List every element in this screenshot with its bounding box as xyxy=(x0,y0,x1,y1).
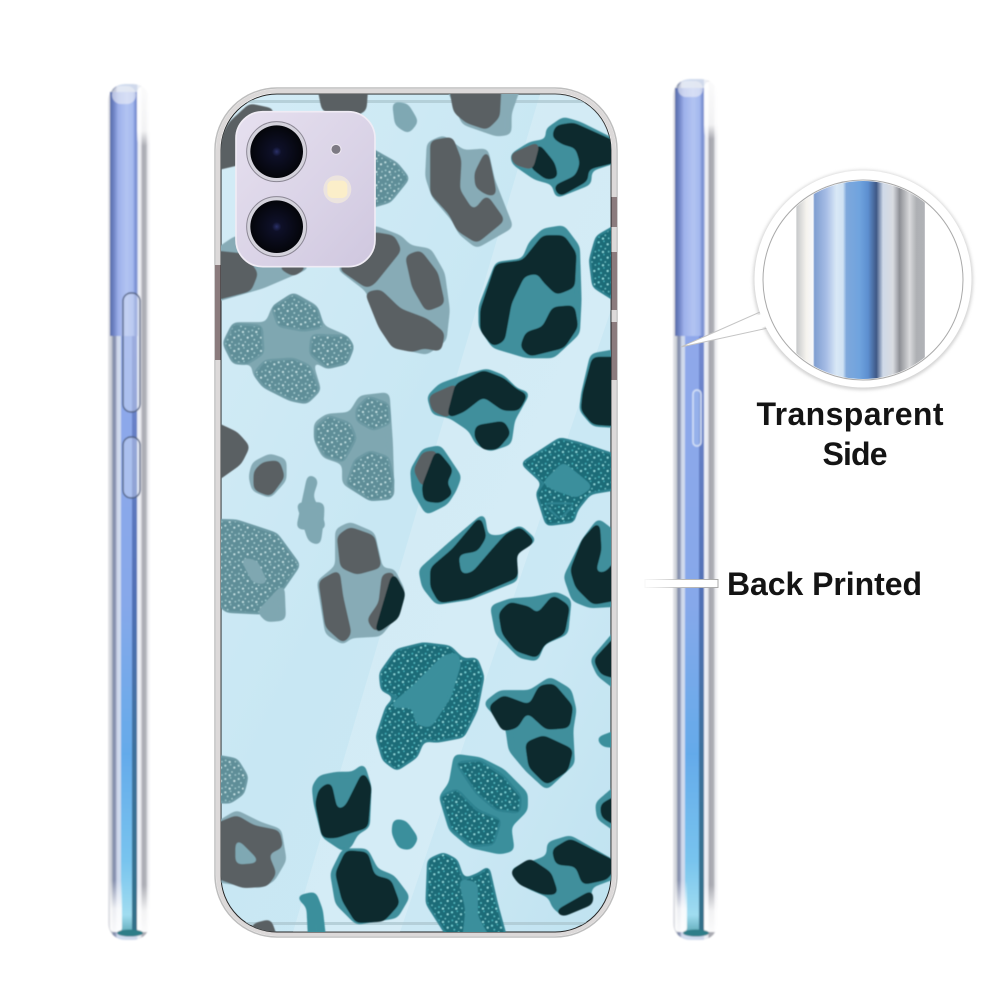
spot: left behind camera xyxy=(221,236,307,302)
magnified stripes xyxy=(763,180,963,380)
right side view of phone case xyxy=(673,79,718,940)
spot: big grey below camera xyxy=(338,227,448,353)
spot: bottom glitter xyxy=(427,853,507,940)
spot: right edge dark bottom xyxy=(597,783,620,833)
spot: top right teal xyxy=(512,118,620,197)
bottom highlights xyxy=(675,880,687,932)
spot: small grey xyxy=(250,455,285,497)
back of phone case with leopard print xyxy=(212,85,620,940)
label: Back Printed: Back Printed xyxy=(727,566,922,602)
microphone dot xyxy=(331,144,341,154)
leopard spots, lower half xyxy=(212,503,620,940)
spot: right edge glitter xyxy=(588,226,611,300)
spot: glitter tail xyxy=(543,503,575,519)
spot: grey glitter centre xyxy=(315,393,393,500)
spot: dark lower xyxy=(332,850,408,923)
spot: pale sliver xyxy=(297,475,325,528)
spot: grey glitter left xyxy=(212,520,299,621)
pointer bar for Back Printed xyxy=(645,580,718,588)
label: Transparent: Transparent xyxy=(756,396,944,432)
spot: small pale top xyxy=(393,103,417,133)
spot: bottom left small xyxy=(252,921,277,940)
spot: left edge glitter xyxy=(221,754,248,804)
side button shadows xyxy=(215,197,617,380)
zoom callout: transparent side xyxy=(681,170,973,390)
spot: top middle xyxy=(318,94,368,114)
spot: pale sliver lower part xyxy=(297,503,323,544)
spot: middle teal with grey xyxy=(428,370,528,450)
leopard spots, upper half xyxy=(212,85,620,528)
spot: right edge dark middle xyxy=(590,634,611,688)
spot: dark with teal xyxy=(313,765,370,850)
spot: grey glitter left xyxy=(223,293,353,403)
side buttons xyxy=(123,293,140,498)
camera module xyxy=(236,112,375,267)
spot: bottom right dark xyxy=(512,837,617,915)
lens: lower xyxy=(247,197,307,257)
spot: dark teal right xyxy=(485,678,575,788)
bottom highlights xyxy=(110,880,122,932)
lens: upper xyxy=(247,122,307,182)
spot: grey with black tip xyxy=(318,523,404,643)
spot: dark teal top xyxy=(420,515,535,603)
spot: teal with grey small xyxy=(412,447,460,513)
side button xyxy=(693,390,701,446)
spot: small teal right xyxy=(598,731,611,748)
spot: large dark teal xyxy=(480,227,580,357)
spot: dark heart xyxy=(492,593,570,660)
spot: top left behind camera xyxy=(221,104,274,170)
callout pointer xyxy=(681,312,768,347)
spot: right edge dark xyxy=(579,349,611,428)
flash xyxy=(323,175,351,203)
spot: glitter behind camera xyxy=(376,150,409,208)
spot: left edge grey xyxy=(221,424,250,479)
left side view of phone case xyxy=(108,84,150,940)
spot: bottom teal sliver xyxy=(297,893,325,940)
spot: large teal glitter xyxy=(377,643,483,770)
spot: grey ring xyxy=(212,812,285,887)
diagonal reflection xyxy=(293,94,611,932)
spot: grey tall xyxy=(427,137,512,247)
spot: top centre right xyxy=(448,94,520,137)
spot: teal glitter lower xyxy=(440,755,527,853)
label: Side: Side xyxy=(822,436,888,472)
spot: small teal oval xyxy=(393,820,417,849)
spot: right edge teal xyxy=(564,520,611,609)
spot: teal glitter right xyxy=(522,438,620,525)
